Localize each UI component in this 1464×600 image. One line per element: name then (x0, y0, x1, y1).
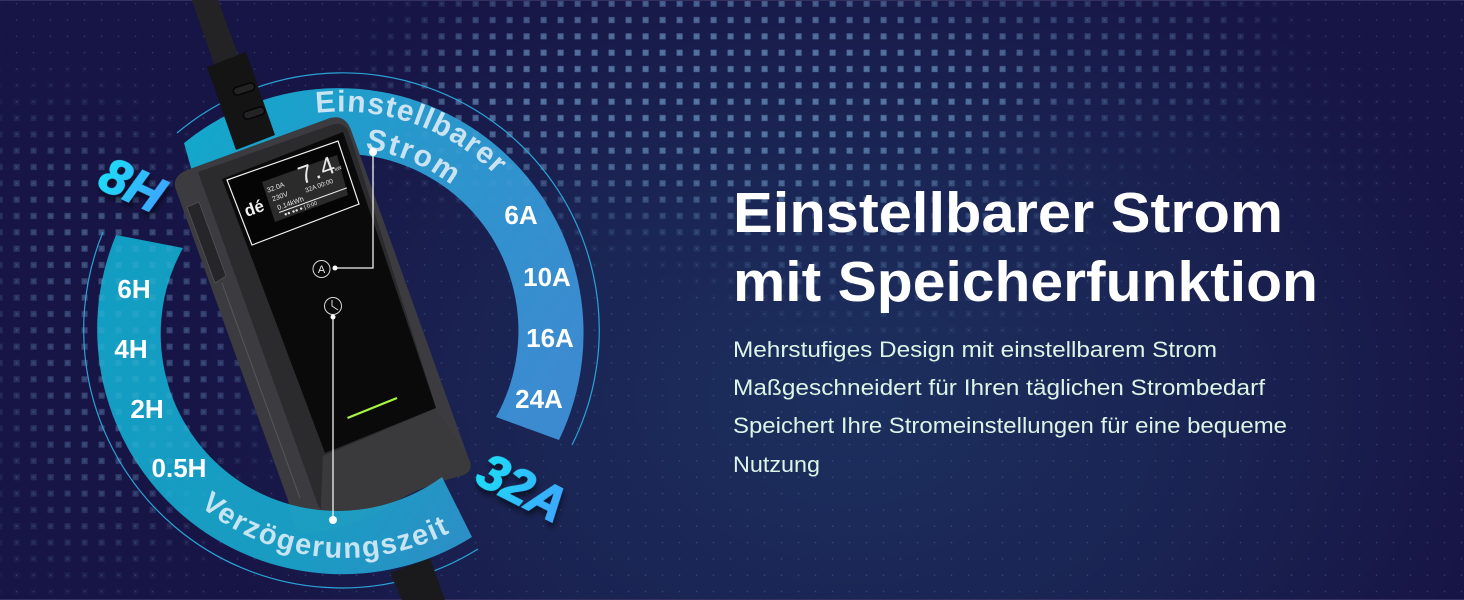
brand logo: dé (242, 196, 267, 221)
title (733, 181, 1318, 314)
label: 32A: 32A (468, 442, 576, 534)
LCD: 230V (271, 191, 289, 203)
current values: 6A (504, 200, 538, 230)
side rim highlight (222, 283, 300, 498)
charge indicator (348, 398, 397, 418)
current button icon (313, 260, 330, 278)
current values: 16A (526, 323, 574, 353)
charger cable top (192, 0, 275, 150)
delay button icon (324, 298, 342, 314)
band: delay time (97, 235, 472, 574)
LCD: 7.4 (294, 151, 340, 190)
delay values: 2H (130, 394, 164, 424)
title: Einstellbarer Strom (733, 181, 1283, 245)
current values: 10A (523, 262, 571, 292)
band label: Einstellbarer Strom: Einstellbarer (316, 90, 506, 172)
title: mit Speicherfunktion (733, 250, 1318, 314)
black panel (222, 132, 436, 453)
label: 8H: 8H (91, 146, 174, 224)
delay values: 0.5H (152, 453, 206, 483)
display frame (227, 141, 359, 245)
LCD: ●● ●● ● | 0:00 (283, 201, 318, 218)
description: Speichert Ihre Stromeinstellungen für eine bequeme (733, 413, 1287, 438)
band: adjustable current (184, 88, 584, 440)
description: Maßgeschneidert für Ihren täglichen Strombedarf (733, 375, 1266, 400)
LCD: kW (334, 165, 343, 173)
delay values (114, 274, 206, 483)
thin ring arcs (84, 73, 599, 588)
current values (504, 200, 574, 414)
device body (175, 117, 471, 534)
callout: delay button (329, 314, 337, 524)
current button icon: A (318, 264, 326, 276)
LCD (262, 149, 352, 222)
charger device (175, 117, 471, 534)
LCD: 32A 00:00 (304, 178, 335, 194)
band label: Einstellbarer Strom: Strom (366, 130, 458, 184)
lower face (320, 408, 471, 531)
device front face (198, 124, 436, 510)
side grip (187, 202, 226, 283)
band label: Verzögerungszeit: Verzögerungszeit (206, 490, 450, 562)
description: Nutzung (733, 452, 820, 477)
LCD: 0.14kWh (277, 196, 305, 212)
charger cable bottom (390, 558, 445, 600)
delay values: 4H (114, 334, 148, 364)
description: Mehrstufiges Design mit einstellbarem Strom (733, 337, 1217, 362)
description (733, 337, 1287, 477)
LCD: 32.0A (266, 182, 286, 195)
current values: 24A (515, 384, 563, 414)
delay values: 6H (117, 274, 151, 304)
callout: current button (332, 148, 377, 270)
